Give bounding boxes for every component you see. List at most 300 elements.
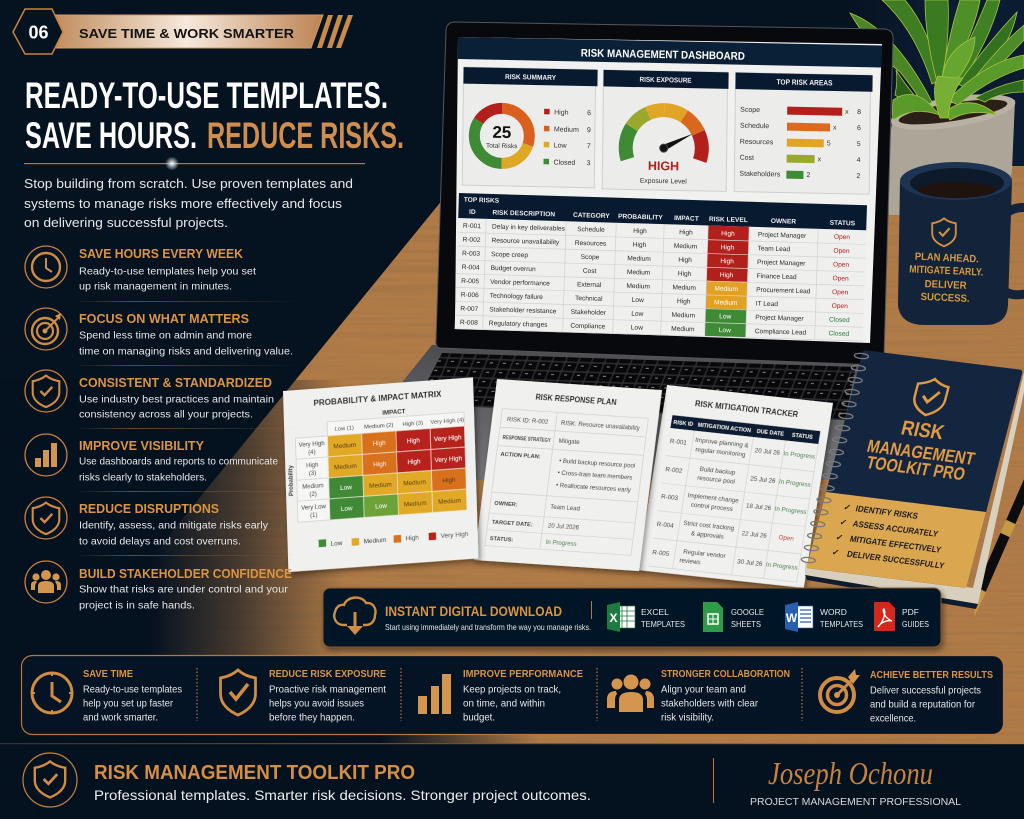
panel: top risk areas	[734, 73, 873, 194]
notebook checklist	[831, 502, 958, 571]
panel: top risk areas: 8	[857, 109, 861, 116]
outcome: reduce risk exposure: REDUCE RISK EXPOSURE	[269, 669, 386, 680]
table row R-004: High	[720, 272, 734, 279]
outcome: improve performance: IMPROVE PERFORMANCE	[463, 669, 583, 680]
notebook title: RISK	[899, 417, 947, 444]
word label: TEMPLATES	[820, 619, 863, 629]
outcome: stronger collaboration: STRONGER COLLABORATION	[661, 669, 790, 680]
icon: shield	[25, 497, 67, 539]
table row R-004: Budget overrun	[491, 265, 536, 273]
table row R-001: R-001	[463, 223, 481, 230]
document: probability and impact matrix: Low	[375, 503, 387, 511]
document: probability and impact matrix: Medium	[438, 497, 461, 506]
dashboard title bar	[458, 37, 882, 67]
table row R-002: Resource unavailability	[491, 237, 560, 246]
icon: google sheets	[703, 602, 723, 632]
table row R-005: Procurement Lead	[756, 287, 811, 295]
notebook checklist: MITIGATE EFFECTIVELY	[849, 534, 943, 555]
footer shield icon	[23, 753, 77, 807]
document: risk response plan: • Reallocate resources early	[556, 483, 631, 494]
icon: target	[820, 669, 860, 712]
document: risk mitigation tracker: In Progress	[783, 451, 816, 461]
table row R-008: Low	[631, 324, 643, 332]
notebook spiral binding	[801, 353, 869, 563]
document: risk response plan: RISK RESPONSE PLAN	[535, 393, 617, 407]
table row R-005: Medium	[672, 284, 697, 292]
panel: top risk areas: 5	[857, 141, 861, 148]
document: risk mitigation tracker: RISK MITIGATION TRACKER	[694, 399, 799, 419]
document: probability and impact matrix: PROBABILITY & IMPACT MATRIX	[313, 389, 442, 408]
outcome: stronger collaboration: risk visibility.	[661, 712, 714, 724]
notebook checklist: ✓	[843, 502, 852, 512]
document: risk mitigation tracker: 22 Jul 26	[741, 530, 768, 540]
notebook pages	[805, 372, 1024, 604]
badge ribbon	[13, 9, 353, 54]
document: risk response plan: OWNER:	[494, 501, 518, 508]
document: risk mitigation tracker: In Progress	[774, 506, 807, 516]
matrix row headers: (2)	[309, 492, 317, 498]
main headline: REDUCE RISKS.	[207, 114, 404, 156]
document: risk mitigation tracker: regular monitoring	[695, 446, 746, 459]
word label	[820, 607, 863, 629]
google sheets label	[731, 607, 764, 629]
table row R-008: Low	[719, 327, 731, 334]
hexagon number badge: 06	[28, 22, 49, 42]
intro paragraph	[24, 176, 353, 230]
document: risk mitigation tracker: 25 Jul 26	[750, 475, 776, 485]
dashboard screen	[455, 37, 882, 343]
panel: outcomes strip	[22, 656, 1004, 734]
matrix row headers: (1)	[310, 513, 318, 519]
matrix row headers: (4)	[308, 450, 316, 456]
plant pot	[888, 100, 1015, 215]
intro paragraph: Stop building from scratch. Use proven templates and	[24, 176, 353, 191]
table row R-006: Medium	[714, 299, 738, 307]
benefit: save hours every week: up risk management in minutes.	[79, 282, 232, 292]
legend: 9	[587, 127, 591, 134]
table row R-002: High	[721, 244, 735, 252]
document: probability and impact matrix: Low	[340, 484, 352, 492]
benefit: consistent and standardized: Use industry best practices and maintain	[79, 394, 274, 406]
document: risk mitigation tracker: R-004	[656, 521, 675, 530]
table headers: RISK LEVEL	[709, 216, 748, 224]
benefit: reduce disruptions: REDUCE DISRUPTIONS	[79, 502, 219, 516]
table headers: IMPACT	[674, 215, 699, 223]
table row R-003: R-003	[462, 250, 480, 258]
document: probability and impact matrix: IMPACT	[382, 408, 406, 417]
panel: risk summary: Total Risks	[486, 143, 518, 150]
table row R-007: Stakeholder resistance	[489, 306, 557, 315]
excel label: TEMPLATES	[641, 619, 685, 629]
benefit: improve visibility: risks clearly to stakeholders.	[79, 472, 207, 484]
table row R-007: Stakeholder	[571, 309, 607, 317]
needle	[660, 133, 693, 153]
document: probability and impact matrix: Medium	[334, 463, 357, 471]
icon: shield	[25, 370, 67, 412]
outcome: stronger collaboration: Align your team and	[661, 684, 746, 696]
table row R-007: Closed	[829, 317, 850, 324]
footer tagline: Professional templates. Smarter risk decisions. Stronger project outcomes.	[94, 787, 591, 803]
document: risk mitigation tracker: STATUS	[791, 433, 813, 441]
document: risk mitigation tracker: R-003	[661, 493, 679, 502]
table row R-001: High	[721, 230, 735, 238]
notebook checklist: ✓	[831, 547, 840, 557]
notebook checklist: IDENTIFY RISKS	[855, 503, 920, 521]
panel: top risk areas: 2	[806, 172, 810, 179]
laptop bezel	[436, 22, 893, 365]
document: risk response plan: ACTION PLAN:	[500, 452, 541, 461]
table row R-004: Medium	[627, 269, 651, 277]
table row R-003: Scope creep	[491, 251, 529, 259]
table row R-002: Resources	[575, 240, 607, 248]
table headers: CATEGORY	[573, 212, 610, 220]
document: risk mitigation tracker: MITIGATION ACTION	[697, 422, 751, 434]
icon: excel: X	[609, 611, 618, 625]
document: probability and impact matrix: High	[373, 440, 386, 448]
legend: 7	[587, 143, 591, 150]
document: risk mitigation tracker	[638, 385, 833, 588]
table headers: STATUS	[830, 220, 856, 227]
panel: top risk areas: 4	[857, 157, 861, 164]
table row R-006: Technical	[575, 295, 603, 303]
matrix legend: High	[406, 535, 419, 543]
table row R-008: Regulatory changes	[489, 320, 548, 329]
matrix row headers	[295, 436, 330, 522]
table headers: ID	[469, 209, 476, 216]
table row R-001: High	[633, 228, 647, 235]
outcome: reduce risk exposure	[221, 669, 386, 724]
table row R-005: Open	[832, 289, 849, 296]
donut chart	[463, 97, 540, 175]
panel: instant digital download	[323, 588, 941, 647]
table row R-005: Medium	[626, 283, 651, 291]
outcome: reduce risk exposure: Proactive risk management	[269, 684, 386, 696]
table row R-001: Open	[834, 234, 850, 241]
outcome: achieve better results: excellence.	[870, 714, 916, 724]
outcome: achieve better results: and build a reputation for	[870, 700, 976, 710]
notebook checklist: ✓	[835, 532, 844, 542]
table row R-001: High	[679, 229, 693, 237]
notebook checklist: DELIVER SUCCESSFULLY	[846, 549, 946, 571]
outcome: reduce risk exposure: before they happen.	[269, 712, 355, 724]
notebook title	[861, 414, 983, 485]
document: probability and impact matrix: Medium	[404, 500, 427, 509]
document: probability and impact matrix: Medium	[333, 442, 356, 450]
table row R-007	[460, 305, 850, 324]
table row R-005: Vendor performance	[490, 279, 550, 288]
legend: Closed	[553, 159, 575, 167]
notebook title: MANAGEMENT	[865, 436, 977, 469]
table row R-007: Medium	[671, 312, 696, 320]
benefit: focus on what matters: Spend less time on admin and more	[79, 330, 252, 342]
document: probability and impact matrix: Medium	[403, 479, 426, 488]
top risks table	[455, 193, 867, 341]
icon: cloud download	[334, 598, 376, 635]
table row R-008: Compliance	[570, 323, 606, 331]
table row R-007: Project Manager	[755, 314, 805, 323]
table row R-004	[462, 264, 849, 283]
mug handle	[1006, 208, 1024, 295]
table headers: TOP RISKS	[464, 197, 500, 205]
outcome: save time	[32, 669, 182, 724]
ribbon text: SAVE TIME & WORK SMARTER	[79, 26, 295, 41]
benefit: focus on what matters	[25, 308, 293, 358]
table row R-003: Project Manager	[757, 259, 806, 268]
outcome: stronger collaboration: stakeholders with clear	[661, 698, 759, 710]
table row R-004: R-004	[462, 264, 480, 272]
table row R-008: Medium	[671, 326, 695, 333]
document: probability and impact matrix: Very High	[434, 434, 462, 443]
table row R-006	[461, 292, 848, 310]
wooden desk	[161, 166, 1024, 743]
mug slogan: PLAN AHEAD.	[915, 251, 979, 265]
table row R-002: R-002	[462, 236, 481, 244]
mug slogan: DELIVER	[924, 278, 967, 292]
document: risk response plan: RESPONSE STRATEGY	[502, 435, 551, 444]
table row R-005: R-005	[461, 278, 480, 285]
mug slogan	[908, 250, 984, 306]
icon: clock	[25, 246, 67, 288]
document: probability and impact matrix: High	[373, 461, 387, 469]
ribbon stripes	[317, 15, 353, 48]
table row R-003: Open	[833, 261, 850, 269]
outcome: save time: and work smarter.	[83, 712, 158, 724]
document: probability and impact matrix: Very High	[434, 455, 463, 464]
benefit: build stakeholder confidence: BUILD STAKEHOLDER CONFIDENCE	[79, 567, 292, 581]
document: risk response plan: RISK: Resource unavailability	[561, 421, 640, 432]
pdf label	[902, 607, 929, 629]
table row R-006: R-006	[461, 292, 479, 299]
matrix cells	[327, 426, 467, 520]
document: risk response plan: Mitigate	[558, 439, 581, 446]
benefit: build stakeholder confidence: Show that risks are under control and your	[79, 584, 289, 596]
table row R-008: R-008	[460, 319, 478, 327]
benefit: build stakeholder confidence: project is in safe hands.	[79, 600, 195, 612]
document: risk mitigation tracker: Implement change	[687, 492, 740, 505]
download heading: INSTANT DIGITAL DOWNLOAD	[385, 604, 562, 619]
panel: top risk areas: x	[818, 156, 822, 163]
icon: excel	[607, 602, 635, 632]
document: risk mitigation tracker: Improve planning &	[695, 437, 750, 450]
icon: shield	[221, 670, 255, 715]
main headline	[25, 74, 404, 156]
table row R-002: Team Lead	[757, 245, 791, 253]
document: risk mitigation tracker: Build backup	[699, 466, 736, 477]
document: risk mitigation tracker: control process	[690, 502, 733, 513]
notebook title: TOOLKIT PRO	[864, 452, 968, 484]
document: risk response plan: • Build backup resource pool	[559, 459, 635, 470]
matrix legend: Very High	[441, 531, 469, 540]
document: probability and impact matrix: High	[407, 458, 421, 466]
document: risk response plan: • Cross-train team members	[557, 471, 633, 482]
outcome: save time: help you set up faster	[83, 698, 174, 710]
benefit: focus on what matters: FOCUS ON WHAT MATTERS	[79, 312, 249, 326]
document: risk response plan	[474, 379, 662, 571]
icon: target	[25, 308, 67, 350]
table row R-002	[462, 236, 850, 255]
notebook: risk management toolkit pro	[799, 349, 1024, 609]
pen	[974, 478, 1024, 617]
laptop base and keyboard	[400, 345, 886, 480]
document: probability and impact matrix: Medium	[369, 481, 392, 490]
excel label	[641, 607, 685, 629]
main headline: SAVE HOURS.	[25, 114, 197, 156]
document: probability and impact matrix	[283, 377, 478, 572]
intro paragraph: on delivering successful projects.	[24, 215, 228, 230]
table row R-008: Closed	[828, 330, 850, 338]
icon: people	[25, 561, 67, 603]
laptop	[400, 22, 893, 480]
panel: risk summary	[462, 67, 598, 188]
panel: risk exposure: RISK EXPOSURE	[639, 77, 692, 85]
matrix column headers: High (3)	[402, 421, 423, 428]
matrix row headers: Very Low	[301, 504, 327, 512]
mug slogan: MITIGATE EARLY.	[909, 263, 984, 279]
table row R-004: Open	[832, 275, 849, 283]
icon: team	[607, 674, 654, 712]
outcome: save time: SAVE TIME	[83, 669, 133, 680]
panel: risk exposure	[602, 70, 729, 202]
dashboard title bar: RISK MANAGEMENT DASHBOARD	[581, 47, 745, 63]
table row R-003: Medium	[627, 255, 651, 263]
panel: top risk areas: 2	[856, 173, 860, 180]
matrix row headers: Very High	[299, 441, 325, 449]
benefit: save hours every week: Ready-to-use templates help you set	[79, 266, 256, 278]
panel: top risk areas: TOP RISK AREAS	[776, 77, 833, 87]
signature: Joseph Ochonu	[768, 755, 933, 791]
outcome: achieve better results	[820, 669, 993, 724]
plant leaves	[850, 0, 1024, 120]
document: probability and impact matrix: Probability	[288, 464, 295, 496]
document: risk mitigation tracker: 30 Jul 26	[737, 558, 763, 568]
document: probability and impact matrix: High	[407, 437, 420, 445]
table headers: RISK DESCRIPTION	[492, 210, 555, 218]
matrix row headers: High	[306, 463, 319, 469]
table headers	[463, 197, 856, 227]
legend: 3	[586, 160, 591, 167]
table row R-005: External	[577, 281, 602, 289]
pdf label: GUIDES	[902, 619, 929, 629]
legend: Low	[554, 142, 568, 150]
panel: risk exposure: Exposure Level	[640, 178, 687, 186]
table row R-006: High	[677, 298, 691, 306]
table headers: OWNER	[771, 218, 796, 226]
table row R-005: Medium	[714, 285, 739, 293]
outcome: improve performance	[418, 669, 583, 724]
panel: top risk areas: 6	[857, 125, 861, 132]
legend: Medium	[554, 126, 579, 134]
notebook checklist: ✓	[839, 517, 848, 527]
table row R-006: IT Lead	[756, 301, 778, 308]
table row R-007: Low	[719, 313, 732, 321]
document: probability and impact matrix: High	[442, 477, 456, 485]
table headers: PROBABILITY	[618, 213, 663, 222]
panel: top risk areas: Schedule	[740, 123, 769, 130]
intro paragraph: systems to manage risks more effectively and focus	[24, 196, 342, 211]
table row R-007: R-007	[460, 305, 479, 313]
gauge	[611, 95, 717, 202]
table row R-008: Compliance Lead	[755, 328, 807, 337]
legend: 6	[587, 110, 591, 117]
matrix column headers: Very High (4)	[430, 418, 464, 426]
panel: top risk areas: Resources	[740, 139, 774, 146]
document: risk mitigation tracker: RISK ID	[673, 420, 694, 428]
potted plant	[850, 0, 1024, 215]
table row R-006: Technology failure	[490, 293, 543, 301]
outcome: achieve better results: ACHIEVE BETTER RESULTS	[870, 670, 993, 681]
benefit: improve visibility: IMPROVE VISIBILITY	[79, 439, 205, 453]
benefit: reduce disruptions: to avoid delays and cost overruns.	[79, 536, 241, 548]
outcome: save time: Ready-to-use templates	[83, 684, 182, 696]
benefit: consistent and standardized	[25, 370, 274, 420]
icon: bar chart	[25, 434, 67, 476]
table row R-001: Project Manager	[758, 232, 807, 240]
panel: risk exposure: HIGH	[648, 159, 679, 173]
document: risk mitigation tracker: reviews	[679, 557, 701, 567]
benefit: improve visibility: Use dashboards and reports to communicate	[79, 456, 278, 468]
notebook cover	[806, 350, 1023, 588]
document: risk mitigation tracker: & approvals	[690, 530, 724, 541]
panel: risk summary: 25	[492, 123, 511, 142]
table row R-003: High	[678, 257, 692, 264]
benefit: save hours every week	[25, 246, 256, 292]
document: risk mitigation tracker: In Progress	[765, 562, 798, 572]
benefit: consistent and standardized: CONSISTENT & STANDARDIZED	[79, 376, 272, 390]
panel: top risk areas: x	[833, 125, 837, 132]
coffee mug	[898, 162, 1024, 325]
table row R-003: Scope	[581, 254, 600, 261]
google sheets label: GOOGLE	[731, 607, 764, 617]
document: risk response plan: TARGET DATE:	[491, 520, 533, 529]
outcome: achieve better results: Deliver successful projects	[870, 686, 981, 696]
table row R-002: High	[633, 242, 647, 249]
matrix column headers: Low (1)	[335, 425, 354, 433]
document: risk mitigation tracker: resource pool	[697, 475, 735, 486]
document: probability and impact matrix: Low	[341, 505, 353, 513]
headline divider with sparkle	[24, 156, 365, 170]
table row R-004: Finance Lead	[757, 273, 797, 281]
mug slogan: SUCCESS.	[920, 291, 970, 305]
main headline: READY-TO-USE TEMPLATES.	[25, 74, 388, 116]
hexagon number badge	[13, 9, 63, 54]
outcome: improve performance: Keep projects on track,	[463, 684, 561, 696]
panel: top risk areas: 5	[827, 140, 831, 147]
table row R-005	[461, 278, 849, 296]
table row R-008	[460, 319, 850, 338]
table row R-001	[463, 223, 850, 241]
document: risk mitigation tracker: In Progress	[778, 479, 811, 489]
table row R-007: Low	[631, 311, 644, 318]
document: risk mitigation tracker: DUE DATE	[756, 429, 785, 438]
table row R-006: Low	[632, 297, 644, 304]
panel: top risk areas: x	[845, 109, 849, 116]
document: risk response plan: RISK ID: R-002	[507, 417, 549, 426]
document: risk mitigation tracker: R-002	[665, 466, 683, 475]
benefit: focus on what matters: time on managing risks and delivering value.	[79, 346, 293, 358]
mug shield icon	[932, 218, 956, 246]
outcome: reduce risk exposure: helps you avoid issues	[269, 698, 364, 710]
document: risk mitigation tracker: R-001	[669, 438, 688, 447]
document: risk response plan: STATUS:	[489, 536, 514, 543]
benefit: reduce disruptions	[25, 497, 268, 548]
panel: risk summary: RISK SUMMARY	[505, 74, 556, 82]
benefit: consistent and standardized: consistency across all your projects.	[79, 410, 253, 420]
google sheets label: SHEETS	[731, 619, 761, 629]
document: risk response plan: In Progress	[545, 540, 577, 548]
notebook checklist: ASSESS ACCURATELY	[852, 518, 940, 539]
icon: clock	[32, 673, 72, 713]
icon: word	[785, 602, 813, 632]
